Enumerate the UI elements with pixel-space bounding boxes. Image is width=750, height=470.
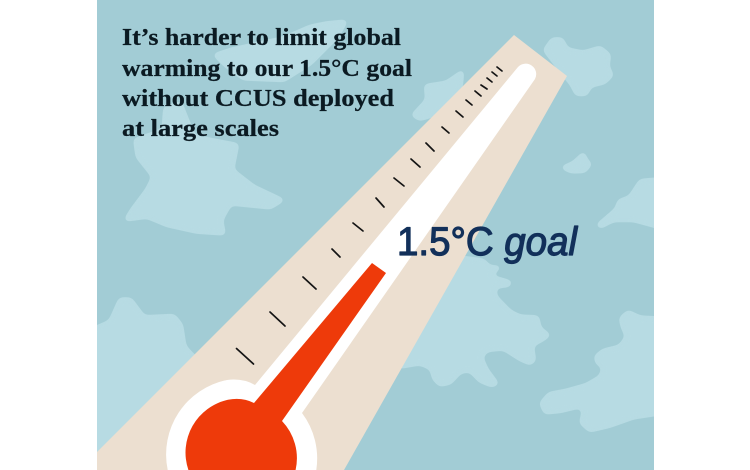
cloud: small centre right (563, 154, 590, 171)
thermometer (97, 35, 567, 470)
cloud: lower right of thermometer (400, 257, 548, 385)
title: at large scales (122, 116, 279, 142)
thermometer body (97, 35, 567, 470)
cloud: left of thermometer (413, 72, 462, 119)
title (122, 25, 412, 142)
scale ticks (236, 67, 502, 364)
clouds (84, 22, 670, 460)
thermometer red column (186, 263, 386, 470)
title: without CCUS deployed (122, 86, 395, 112)
cloud: right middle (598, 178, 654, 228)
panel: sky background (97, 0, 654, 470)
cloud: upper right (545, 39, 612, 94)
cloud: lower left (97, 297, 194, 452)
title: warming to our 1.5°C goal (122, 56, 412, 82)
cloud: upper left (126, 22, 345, 233)
infographic (97, 0, 654, 470)
thermometer white channel (166, 64, 536, 470)
label: 1.5°C goal: 1.5°C goal (397, 220, 578, 264)
title: It’s harder to limit global (122, 25, 401, 51)
cloud: far right lower (541, 312, 670, 430)
